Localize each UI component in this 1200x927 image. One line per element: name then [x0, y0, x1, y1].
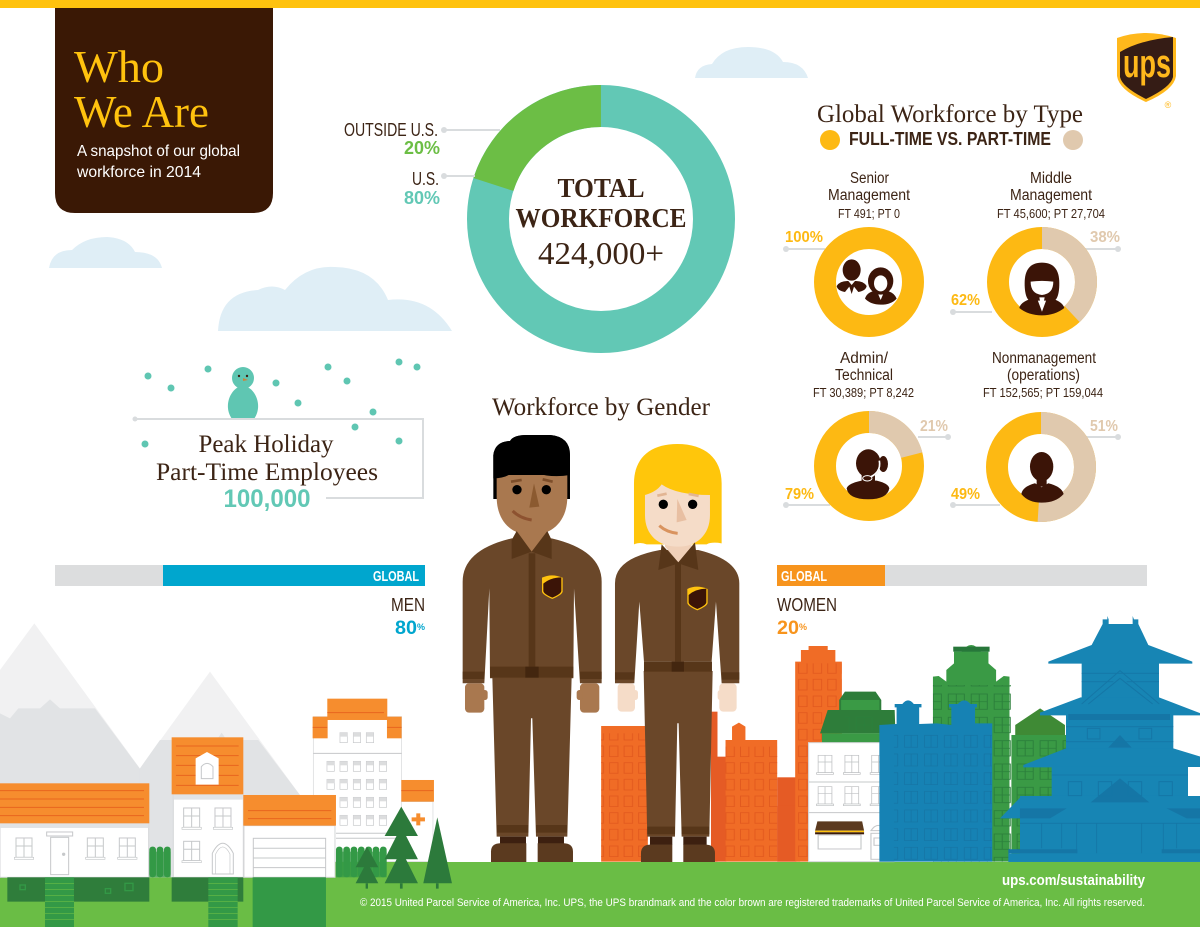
cloud left small — [49, 237, 162, 268]
garage — [243, 795, 336, 927]
cloud left large — [218, 267, 452, 331]
women bar: 20 — [777, 618, 799, 639]
panel: nonmanagement — [950, 350, 1121, 511]
cloud top — [695, 47, 808, 78]
panel: middle management: Middle — [1030, 170, 1072, 187]
panel: nonmanagement: 49% — [951, 486, 980, 503]
footer url: ups.com/sustainability — [1002, 872, 1146, 889]
fence — [149, 847, 387, 877]
panel: senior management — [783, 170, 913, 326]
donut labels: 20% — [404, 138, 440, 158]
tower building — [313, 699, 434, 862]
donut labels — [344, 120, 500, 208]
icon: worker — [1021, 452, 1064, 503]
subtitle: A snapshot of our global — [77, 143, 240, 160]
women bar: WOMEN — [777, 595, 837, 615]
panel: admin technical: FT 30,389; PT 8,242 — [813, 386, 914, 400]
panel: admin technical: Admin/ — [840, 350, 889, 367]
icon: woman manager — [1019, 263, 1064, 315]
woman legs — [644, 671, 713, 837]
trees — [356, 807, 452, 889]
woman figure — [615, 444, 739, 862]
UPS logo — [1117, 33, 1176, 110]
white building — [809, 743, 894, 862]
woman badge — [687, 587, 708, 610]
woman hands — [618, 683, 737, 712]
mountains — [0, 623, 300, 877]
UPS logo: ® — [1165, 100, 1172, 110]
title — [74, 41, 209, 137]
house one — [0, 783, 149, 927]
panel: nonmanagement: 51% — [1090, 418, 1118, 435]
women bar — [777, 565, 1147, 639]
woman collar — [658, 542, 698, 570]
blue building — [879, 700, 992, 862]
panel: senior management: Senior — [850, 170, 889, 187]
panel: peak holiday: Peak Holiday — [198, 431, 334, 458]
panel: peak holiday — [132, 416, 423, 513]
panel: peak holiday: Part-Time Employees — [156, 459, 378, 486]
man neck — [517, 525, 547, 552]
donut center text: TOTAL — [558, 173, 644, 203]
women bar: % — [799, 622, 807, 632]
woman shirt — [615, 550, 739, 683]
man face — [497, 475, 567, 535]
pagoda white gap — [1188, 767, 1200, 796]
ground — [0, 862, 1200, 927]
men bar: MEN — [391, 595, 425, 615]
man badge — [542, 575, 563, 599]
panel: nonmanagement: Nonmanagement — [992, 350, 1097, 367]
donut labels: U.S. — [412, 169, 439, 189]
snow dots — [142, 358, 420, 448]
panel: senior management: FT 491; PT 0 — [838, 207, 900, 221]
panel: senior management: 100% — [785, 229, 823, 246]
panel: admin technical: 79% — [785, 486, 814, 503]
women bar: GLOBAL — [781, 569, 827, 585]
title panel — [55, 8, 273, 213]
heading: workforce by type: Global Workforce by Type — [817, 101, 1083, 128]
man hands — [465, 683, 599, 713]
icon: two managers — [837, 259, 897, 305]
title: Who — [74, 41, 164, 92]
icon: snowman — [228, 367, 258, 419]
donut labels: 80% — [404, 188, 440, 208]
woman boots — [641, 827, 715, 862]
panel: middle management: 38% — [1090, 229, 1120, 246]
panel: middle management — [950, 170, 1121, 326]
UPS logo: ups — [1123, 42, 1171, 86]
donut center text — [516, 173, 686, 271]
man shirt — [463, 538, 602, 683]
men bar: 80 — [395, 618, 417, 639]
donut center text: 424,000+ — [538, 235, 664, 271]
man collar — [512, 531, 552, 559]
panel: peak holiday: 100,000 — [224, 485, 310, 513]
man boots — [491, 825, 573, 862]
subtitle: workforce in 2014 — [76, 164, 201, 181]
panel: admin technical: Technical — [835, 367, 893, 384]
pagoda details — [1008, 671, 1200, 853]
panel: nonmanagement: FT 152,565; PT 159,044 — [983, 386, 1103, 400]
house two — [172, 737, 243, 927]
panel: admin technical: 21% — [920, 418, 948, 435]
man figure — [463, 435, 602, 862]
heading: workforce by type — [817, 101, 1083, 150]
donut center text: WORKFORCE — [516, 203, 686, 233]
heading: workforce by gender: Workforce by Gender — [492, 394, 711, 421]
donut labels: OUTSIDE U.S. — [344, 120, 438, 140]
panel: senior management: Management — [828, 187, 911, 204]
title: We Are — [74, 86, 209, 137]
men bar: GLOBAL — [373, 569, 419, 585]
top yellow bar — [0, 0, 1200, 8]
panel: middle management: FT 45,600; PT 27,704 — [997, 207, 1105, 221]
total workforce donut — [459, 77, 743, 361]
panel: nonmanagement: (operations) — [1007, 367, 1080, 384]
men bar — [55, 565, 425, 639]
man legs — [492, 677, 572, 837]
pagoda — [1000, 616, 1200, 862]
woman face — [645, 484, 710, 547]
woman neck — [665, 538, 692, 562]
orange buildings — [601, 646, 842, 862]
panel: middle management: Management — [1010, 187, 1093, 204]
panel: admin technical — [783, 350, 951, 510]
left scene: suburb — [0, 623, 452, 927]
heading: workforce by type: FULL-TIME VS. PART-TIME — [849, 129, 1051, 149]
men bar: % — [417, 622, 425, 632]
woman hair — [634, 444, 722, 544]
icon: headset operator — [847, 449, 889, 499]
right scene: city — [601, 645, 1067, 862]
man hair — [493, 435, 570, 499]
subtitle — [76, 143, 240, 181]
green buildings — [820, 645, 1067, 862]
panel: middle management: 62% — [951, 292, 980, 309]
